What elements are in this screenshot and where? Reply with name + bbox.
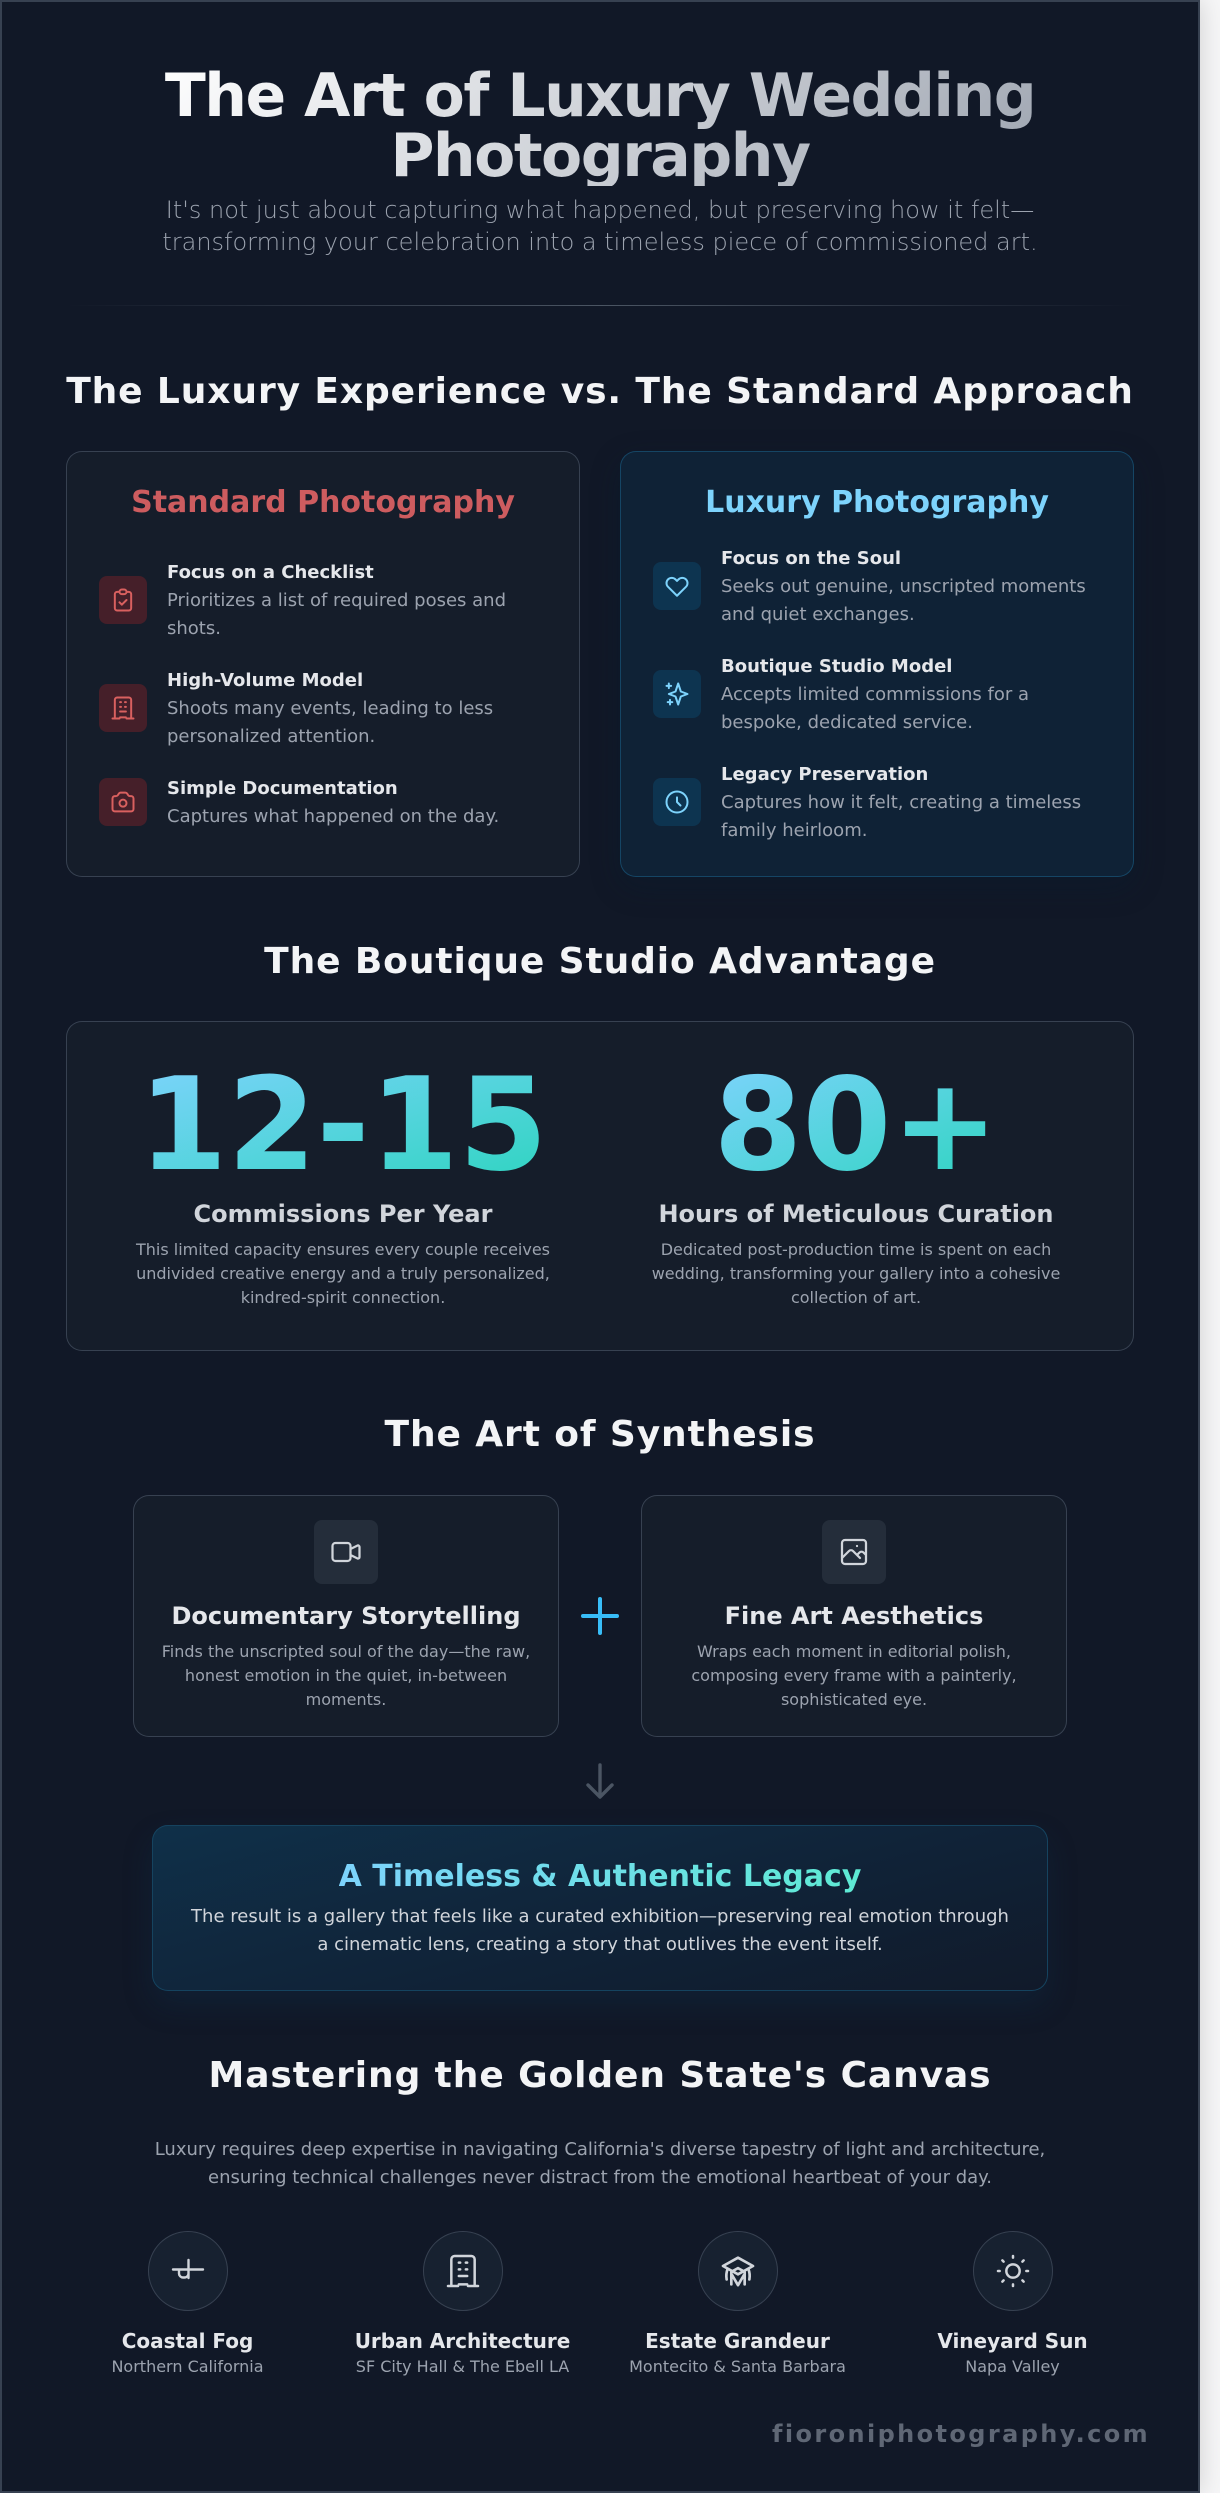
item: boutique studio model <box>653 656 1029 733</box>
callout text <box>190 1906 1009 1955</box>
stat: hours of curation <box>652 1051 1060 1307</box>
location name: Urban Architecture <box>355 2329 570 2353</box>
location region: SF City Hall & The Ebell LA <box>356 2357 569 2376</box>
item: focus on the soul <box>653 548 1086 625</box>
icon: clipboard check <box>99 576 147 624</box>
location name: Coastal Fog <box>122 2329 253 2353</box>
icon: sparkles <box>653 670 701 718</box>
card: fine art aesthetics <box>641 1495 1067 1737</box>
text: simple documentation <box>167 778 499 827</box>
subtitle: It's not just about capturing what happened, but preserving how it felt— <box>166 196 1034 224</box>
item: simple documentation <box>99 778 499 827</box>
icon: camera <box>99 778 147 826</box>
callout title: A Timeless & Authentic Legacy <box>339 1859 861 1894</box>
stat label: Hours of Meticulous Curation <box>658 1200 1054 1228</box>
text: legacy preservation <box>721 764 1081 841</box>
callout text: The result is a gallery that feels like a curated exhibition—preserving real emotion through <box>191 1906 1009 1927</box>
panel heading: luxury: Luxury Photography <box>705 485 1049 520</box>
stat description: Dedicated post-production time is spent on each <box>661 1240 1051 1259</box>
text: focus on the soul: Focus on the Soul <box>721 548 901 569</box>
text: legacy preservation: Captures how it felt, creating a timeless <box>721 792 1081 813</box>
item: high-volume model <box>99 670 493 747</box>
icon: clock <box>653 778 701 826</box>
stat description: This limited capacity ensures every couple receives <box>136 1240 550 1259</box>
heading: art of synthesis: The Art of Synthesis <box>385 1414 815 1455</box>
subtitle: transforming your celebration into a timeless piece of commissioned art. <box>162 228 1038 256</box>
card description: moments. <box>306 1690 386 1709</box>
card description <box>162 1642 530 1709</box>
icon: sun <box>972 2231 1052 2311</box>
card description <box>691 1642 1017 1709</box>
location region: Northern California <box>111 2357 264 2376</box>
callout: timeless legacy <box>152 1825 1048 1991</box>
arrow: down <box>586 1763 614 1799</box>
icon: photo <box>822 1520 886 1584</box>
stat description: undivided creative energy and a truly personalized, <box>136 1264 550 1283</box>
heading: boutique advantage: The Boutique Studio Advantage <box>264 941 936 982</box>
stat description <box>136 1240 550 1307</box>
card description: honest emotion in the quiet, in-between <box>185 1666 507 1685</box>
text: simple documentation: Captures what happened on the day. <box>167 806 499 827</box>
text: high-volume model: Shoots many events, leading to less <box>167 698 493 719</box>
text: focus on a checklist: shots. <box>167 618 221 639</box>
card description: Wraps each moment in editorial polish, <box>697 1642 1011 1661</box>
text: high-volume model: personalized attention. <box>167 726 375 747</box>
text: boutique studio model <box>721 656 1029 733</box>
location name: Vineyard Sun <box>937 2329 1088 2353</box>
title: The Art of Luxury Wedding <box>165 61 1035 131</box>
icon: academic cap <box>698 2231 778 2311</box>
card title: Documentary Storytelling <box>171 1602 521 1630</box>
stat description: collection of art. <box>791 1288 921 1307</box>
intro text: Luxury requires deep expertise in navigating California's diverse tapestry of light and architecture, <box>155 2139 1045 2160</box>
title: Photography <box>390 121 810 191</box>
icon: fog <box>148 2231 228 2311</box>
stat: commissions per year <box>136 1051 550 1307</box>
text: focus on a checklist <box>167 562 506 639</box>
number: 80+: 80+ <box>713 1051 999 1200</box>
text: boutique studio model: Accepts limited commissions for a <box>721 684 1029 705</box>
stat description <box>652 1240 1060 1307</box>
text: high-volume model: High-Volume Model <box>167 670 363 691</box>
text: legacy preservation: family heirloom. <box>721 820 867 841</box>
location region: Montecito & Santa Barbara <box>629 2357 846 2376</box>
panel: boutique stats <box>66 1021 1134 1351</box>
card description: Finds the unscripted soul of the day—the raw, <box>162 1642 530 1661</box>
panel: standard photography <box>66 451 580 877</box>
subtitle <box>162 196 1038 256</box>
intro text <box>155 2139 1045 2188</box>
location name: Estate Grandeur <box>645 2329 830 2353</box>
title <box>150 66 1050 186</box>
footer watermark: fioroniphotography.com <box>772 2420 1150 2448</box>
stat description: wedding, transforming your gallery into a cohesive <box>652 1264 1060 1283</box>
item: focus on a checklist <box>99 562 506 639</box>
text: focus on the soul: and quiet exchanges. <box>721 604 915 625</box>
location region: Napa Valley <box>965 2357 1060 2376</box>
text: focus on the soul <box>721 548 1086 625</box>
text: boutique studio model: Boutique Studio Model <box>721 656 952 677</box>
panel heading: standard: Standard Photography <box>131 485 515 520</box>
icon: video camera <box>314 1520 378 1584</box>
location: coastal fog <box>111 2231 264 2376</box>
text: legacy preservation: Legacy Preservation <box>721 764 928 785</box>
location: estate grandeur <box>629 2231 846 2376</box>
card description: composing every frame with a painterly, <box>691 1666 1017 1685</box>
intro text: ensuring technical challenges never distract from the emotional heartbeat of your day. <box>208 2167 992 2188</box>
text: focus on the soul: Seeks out genuine, unscripted moments <box>721 576 1086 597</box>
card description: sophisticated eye. <box>781 1690 927 1709</box>
heading: luxury vs standard: The Luxury Experience vs. The Standard Approach <box>66 371 1134 412</box>
location: urban architecture <box>355 2231 570 2376</box>
icon: building <box>422 2231 502 2311</box>
panel: luxury photography <box>620 451 1134 877</box>
text: boutique studio model: bespoke, dedicated service. <box>721 712 973 733</box>
callout text: a cinematic lens, creating a story that outlives the event itself. <box>317 1934 883 1955</box>
card: documentary storytelling <box>133 1495 559 1737</box>
card title: Fine Art Aesthetics <box>725 1602 983 1630</box>
text: focus on a checklist: Prioritizes a list of required poses and <box>167 590 506 611</box>
item: legacy preservation <box>653 764 1081 841</box>
location: vineyard sun <box>937 2231 1088 2376</box>
number: 12-15: 12-15 <box>138 1051 548 1200</box>
stat label: Commissions Per Year <box>194 1200 492 1228</box>
icon: heart <box>653 562 701 610</box>
heading: golden state: Mastering the Golden State's Canvas <box>208 2055 992 2096</box>
text: high-volume model <box>167 670 493 747</box>
text: simple documentation: Simple Documentation <box>167 778 398 799</box>
text: focus on a checklist: Focus on a Checklist <box>167 562 374 583</box>
icon: plus <box>581 1597 619 1635</box>
icon: office building <box>99 684 147 732</box>
stat description: kindred-spirit connection. <box>241 1288 445 1307</box>
